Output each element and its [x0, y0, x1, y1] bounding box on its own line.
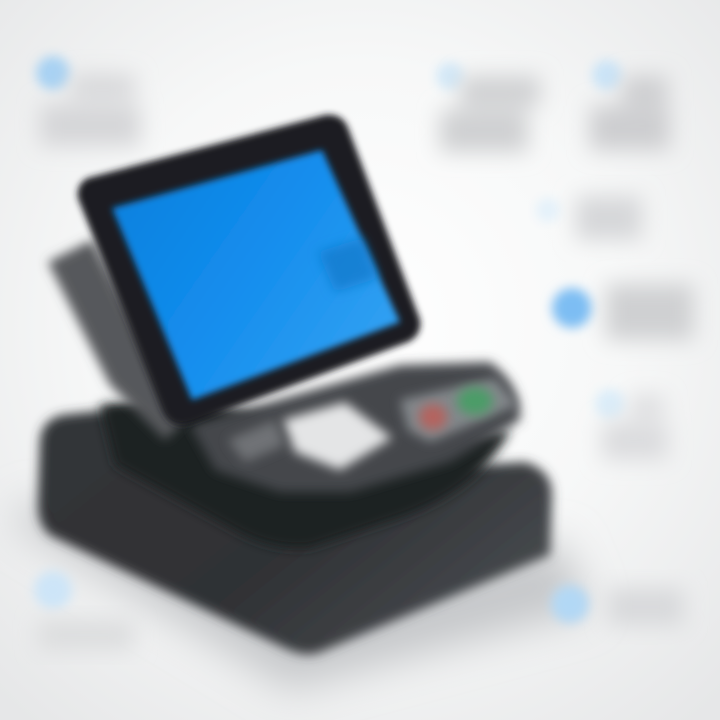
keypad panel	[400, 378, 518, 442]
text block: right feature two	[606, 284, 694, 340]
text block: top-middle feature	[440, 76, 540, 152]
panel: right feature two	[552, 284, 694, 340]
stand behind screen	[48, 240, 185, 440]
panel: top-middle feature	[436, 62, 540, 152]
panel: bottom-right feature	[551, 585, 684, 626]
red button	[419, 404, 447, 430]
base of terminal	[38, 408, 552, 654]
green button	[457, 387, 493, 415]
keyboard deck	[190, 362, 520, 492]
icon: right feature three	[595, 389, 625, 419]
upper deck of base	[100, 400, 510, 549]
illustration: POS terminal	[38, 115, 552, 654]
text block: top-left feature	[40, 75, 140, 146]
panel: top-right feature	[590, 60, 670, 150]
text block: bottom-left feature	[38, 620, 134, 650]
key: left grey keys	[228, 420, 285, 462]
panel: top-left feature	[36, 56, 140, 146]
screen display	[112, 150, 400, 400]
panel: right feature three	[595, 389, 668, 460]
text block: top-right feature	[590, 76, 670, 150]
text block: right feature one	[576, 196, 642, 240]
icon: bottom-right feature	[551, 585, 589, 623]
white key pad	[283, 402, 392, 470]
icon: bottom-left feature	[34, 571, 72, 609]
panel: bottom-left feature	[34, 571, 134, 650]
icon: right feature two	[552, 288, 592, 328]
screen detail	[318, 238, 378, 292]
screen bezel	[78, 115, 420, 425]
icon: top-right feature	[592, 60, 622, 90]
text block: bottom-right feature	[608, 588, 684, 626]
drop shadow under terminal	[10, 500, 590, 690]
icon: right feature one	[536, 198, 560, 222]
icon: top-middle feature	[436, 62, 464, 90]
text block: right feature three	[602, 396, 668, 460]
panel: right feature one	[536, 196, 642, 240]
icon: top-left feature	[36, 56, 70, 90]
